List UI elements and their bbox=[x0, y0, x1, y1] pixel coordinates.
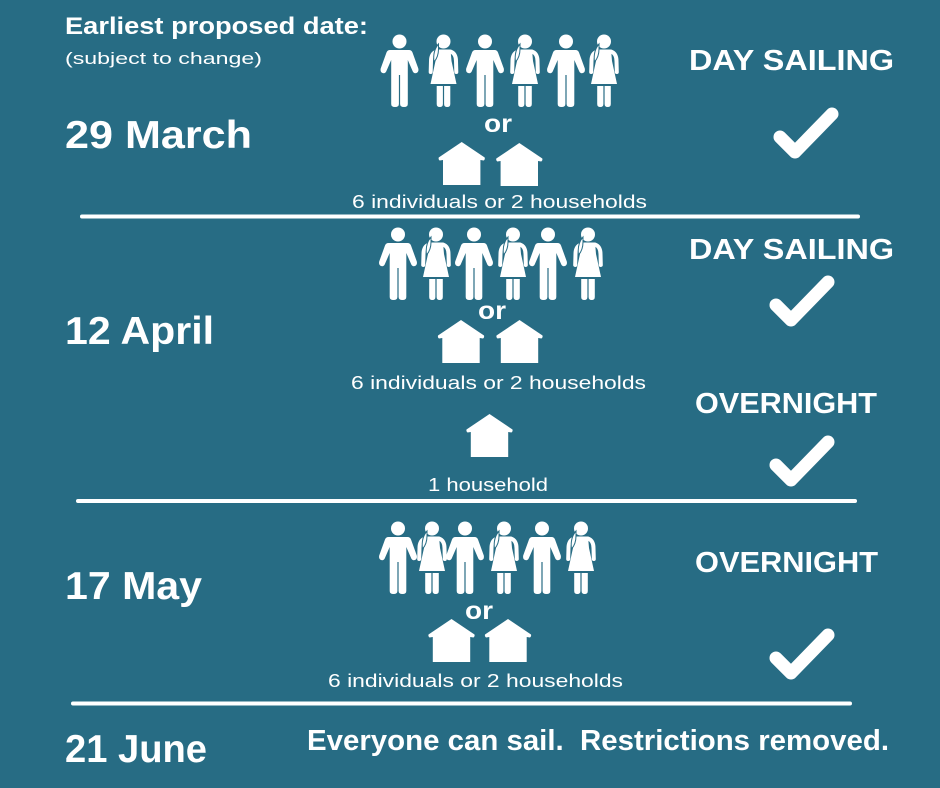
date: 21 June: 21 June bbox=[65, 728, 207, 771]
icon: check mark 4 bbox=[776, 635, 828, 673]
caption: 1 household: 1 household bbox=[428, 475, 548, 495]
houses row 1 bbox=[439, 142, 542, 186]
label: day sailing 2: DAY SAILING bbox=[689, 234, 894, 266]
icon: check mark 3 bbox=[776, 442, 828, 480]
date: 29 March: 29 March bbox=[65, 114, 252, 157]
houses row 3 bbox=[428, 619, 531, 662]
caption row 2: 6 individuals or 2 households bbox=[351, 373, 646, 393]
icon: single house bbox=[466, 414, 513, 457]
or label 2: or bbox=[478, 297, 506, 325]
icon: check mark 2 bbox=[776, 282, 828, 320]
label: overnight 2: OVERNIGHT bbox=[695, 547, 878, 579]
caption row 3: 6 individuals or 2 households bbox=[328, 671, 623, 691]
date: 17 May: 17 May bbox=[65, 565, 202, 608]
houses row 2 bbox=[438, 320, 543, 363]
people row 1 bbox=[381, 34, 617, 107]
subheading: subject to change: (subject to change) bbox=[65, 49, 262, 68]
caption row 1: 6 individuals or 2 households bbox=[352, 192, 647, 212]
people row 3 bbox=[379, 522, 594, 594]
heading: earliest proposed date: Earliest proposed date: bbox=[65, 13, 368, 40]
label: day sailing 1: DAY SAILING bbox=[689, 45, 894, 77]
date: 12 April: 12 April bbox=[65, 310, 214, 353]
people row 2 bbox=[379, 228, 601, 300]
or label 3: or bbox=[465, 597, 493, 625]
icon: check mark 1 bbox=[780, 114, 832, 152]
statement: restrictions removed: Everyone can sail. Restrictions removed. bbox=[307, 725, 889, 757]
label: overnight 1: OVERNIGHT bbox=[695, 388, 877, 420]
or label 1: or bbox=[484, 110, 512, 138]
